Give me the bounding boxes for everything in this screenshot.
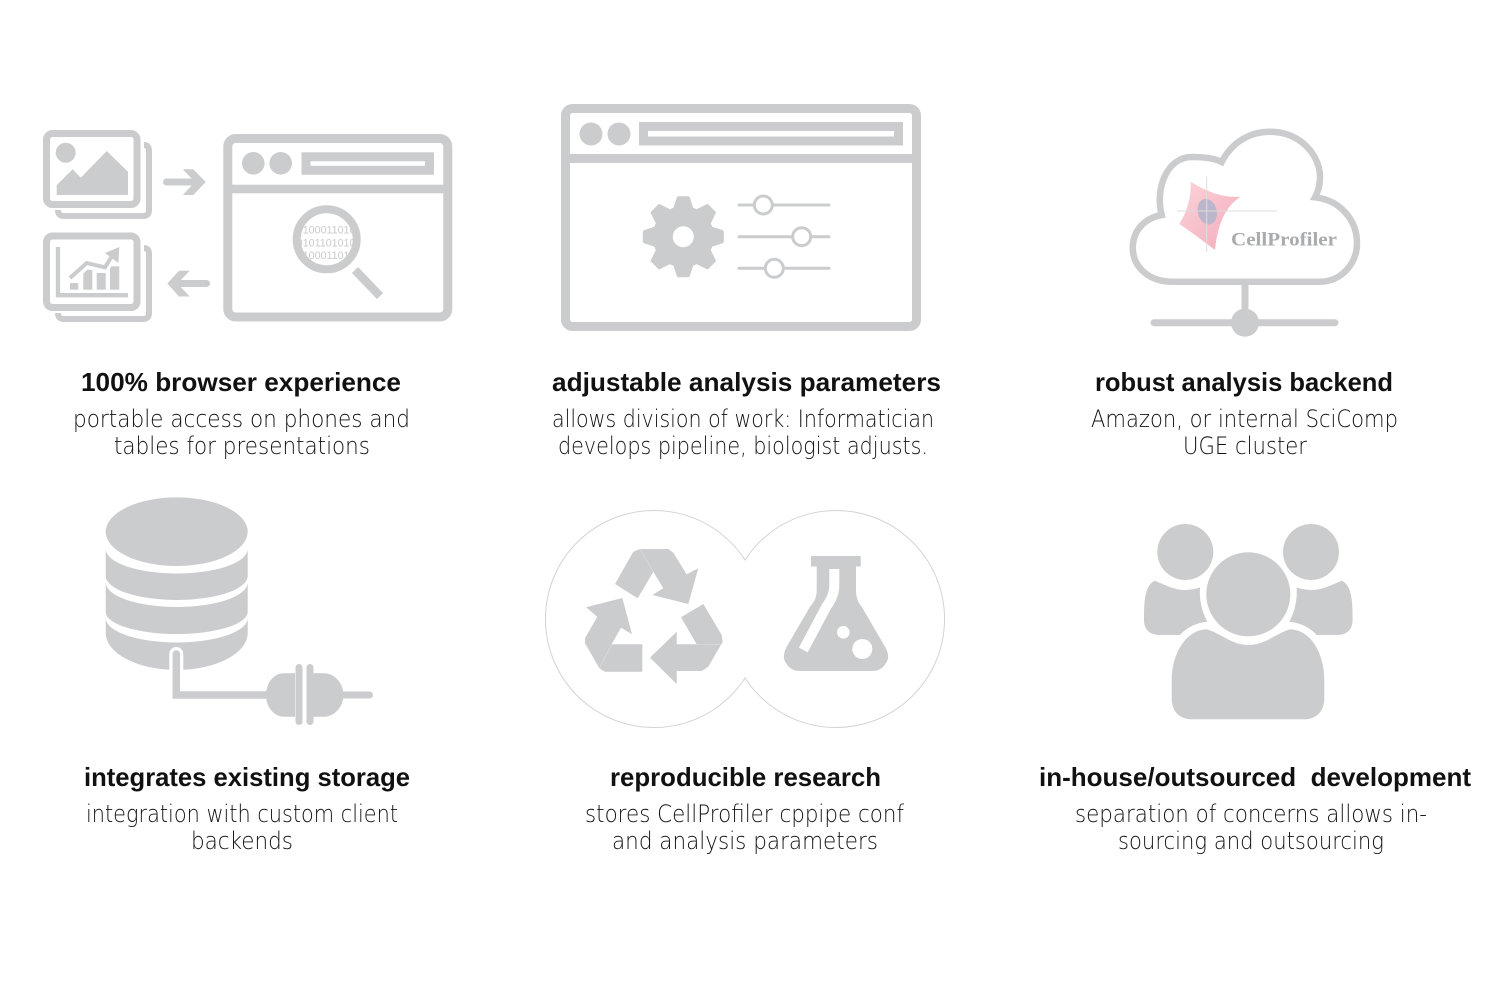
icon: database with plug bbox=[106, 497, 369, 722]
panel: reproducible research bbox=[545, 510, 945, 855]
icon: sliders bbox=[739, 196, 829, 277]
icon: gear bbox=[644, 198, 722, 276]
text: reproducible research description bbox=[585, 800, 904, 855]
panel: analysis backend bbox=[1091, 132, 1398, 460]
text: development description: sourcing and outsourcing bbox=[1118, 827, 1384, 855]
text: browser experience description bbox=[73, 405, 410, 460]
icon: browser window with gear and sliders bbox=[566, 108, 917, 326]
icon: browser window with magnifier: 01000110101 bbox=[297, 224, 361, 236]
text: browser experience description: portable access on phones and bbox=[73, 405, 410, 433]
text: adjustable parameters description: allows division of work: Informatician bbox=[552, 405, 934, 433]
icon: CellProfiler logo: CellProfiler bbox=[1231, 230, 1337, 250]
arrow: to browser bbox=[166, 169, 206, 195]
text: reproducible research description: and analysis parameters bbox=[612, 827, 878, 855]
text: adjustable parameters description: develops pipeline, biologist adjusts. bbox=[558, 432, 928, 460]
heading: development: in-house/outsourced development bbox=[1039, 762, 1471, 792]
panel: browser experience bbox=[46, 134, 448, 460]
text: analysis backend description bbox=[1091, 405, 1398, 460]
icon: double circle outline bbox=[545, 510, 945, 728]
text: analysis backend description: Amazon, or internal SciComp bbox=[1091, 405, 1398, 433]
icon: chart cards bbox=[46, 236, 149, 319]
text: reproducible research description: stores CellProfiler cppipe conf bbox=[585, 800, 904, 828]
text: development description: separation of concerns allows in- bbox=[1075, 800, 1427, 828]
icon: CellProfiler logo bbox=[1177, 177, 1337, 252]
text: development description bbox=[1075, 800, 1427, 855]
icon: image cards bbox=[46, 134, 149, 216]
heading: reproducible research: reproducible research bbox=[610, 762, 881, 792]
panel: existing storage bbox=[84, 497, 410, 855]
icon: browser window with magnifier bbox=[228, 138, 448, 317]
text: existing storage description bbox=[86, 800, 398, 855]
heading: adjustable parameters: adjustable analysis parameters bbox=[552, 367, 941, 397]
icon: browser window with magnifier: 01000110101 bbox=[297, 250, 361, 262]
icon: group of people bbox=[1144, 524, 1353, 719]
heading: analysis backend: robust analysis backend bbox=[1095, 367, 1393, 397]
icon: cloud network bbox=[1133, 132, 1357, 337]
panel: adjustable parameters bbox=[552, 108, 941, 460]
text: existing storage description: integration with custom client bbox=[86, 800, 398, 828]
arrow: from browser bbox=[167, 271, 206, 296]
text: analysis backend description: UGE cluster bbox=[1183, 432, 1307, 460]
icon: flask bbox=[784, 556, 888, 671]
panel: development bbox=[1039, 524, 1471, 855]
icon: recycle symbol bbox=[585, 549, 723, 684]
heading: browser experience: 100% browser experience bbox=[81, 367, 401, 397]
text: adjustable parameters description bbox=[552, 405, 934, 460]
text: browser experience description: tables for presentations bbox=[114, 432, 370, 460]
icon: browser window with magnifier: 01011010101 bbox=[297, 237, 361, 249]
text: existing storage description: backends bbox=[191, 827, 293, 855]
heading: existing storage: integrates existing storage bbox=[84, 762, 410, 792]
